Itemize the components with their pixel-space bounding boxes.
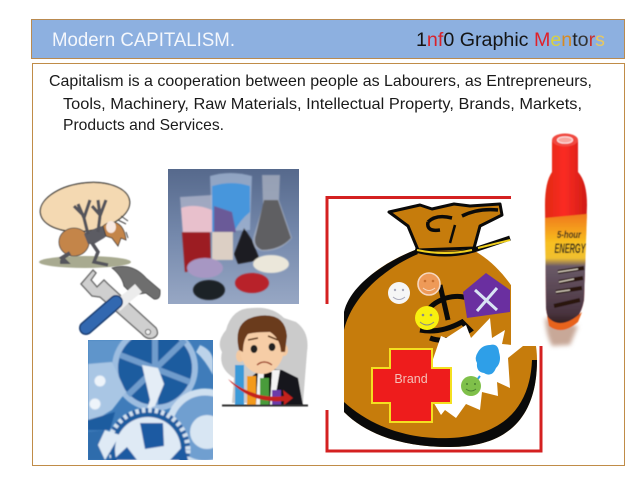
- brand label: 1nf0 Graphic Mentors: [416, 30, 605, 51]
- brand cross: [372, 349, 451, 422]
- orange smiley: [418, 273, 440, 295]
- bag tie: [415, 238, 510, 254]
- icon: worried businessman with chart: [220, 308, 308, 406]
- icon: money bag: [344, 204, 537, 447]
- body text: Tools, Machinery, Raw Materials, Intellectual Property, Brands, Markets,: [63, 96, 582, 113]
- white smiley: [388, 282, 410, 304]
- image: machinery gears: [88, 340, 213, 460]
- icon: ant carrying a load: [37, 177, 133, 268]
- starburst: [432, 318, 523, 418]
- blue cloud: [474, 345, 500, 384]
- dollar sign: [420, 285, 470, 340]
- icon: energy drink bottle: [511, 130, 587, 346]
- icon: wrench and hammer: [81, 266, 160, 338]
- bag neck: [389, 204, 502, 250]
- body text: Capitalism is a cooperation between people as Labourers, as Entrepreneurs,: [49, 73, 592, 90]
- title: Modern CAPITALISM.: [52, 30, 235, 51]
- purple pentagon with tools: [463, 273, 510, 318]
- panel: body: [32, 64, 624, 466]
- image: raw materials photo: [168, 169, 299, 304]
- body text: Products and Services.: [63, 117, 224, 134]
- body text: [49, 73, 592, 134]
- icon: energy drink bottle: 5-hour: [557, 230, 582, 241]
- green smiley: [461, 376, 481, 396]
- yellow smiley: [415, 306, 439, 330]
- brand cross: Brand: [394, 372, 428, 386]
- icon: energy drink bottle: ENERGY: [554, 240, 586, 256]
- bag body: [344, 250, 537, 447]
- panel: header bar: [32, 20, 624, 58]
- icon: red frame around brand bag: [327, 198, 541, 451]
